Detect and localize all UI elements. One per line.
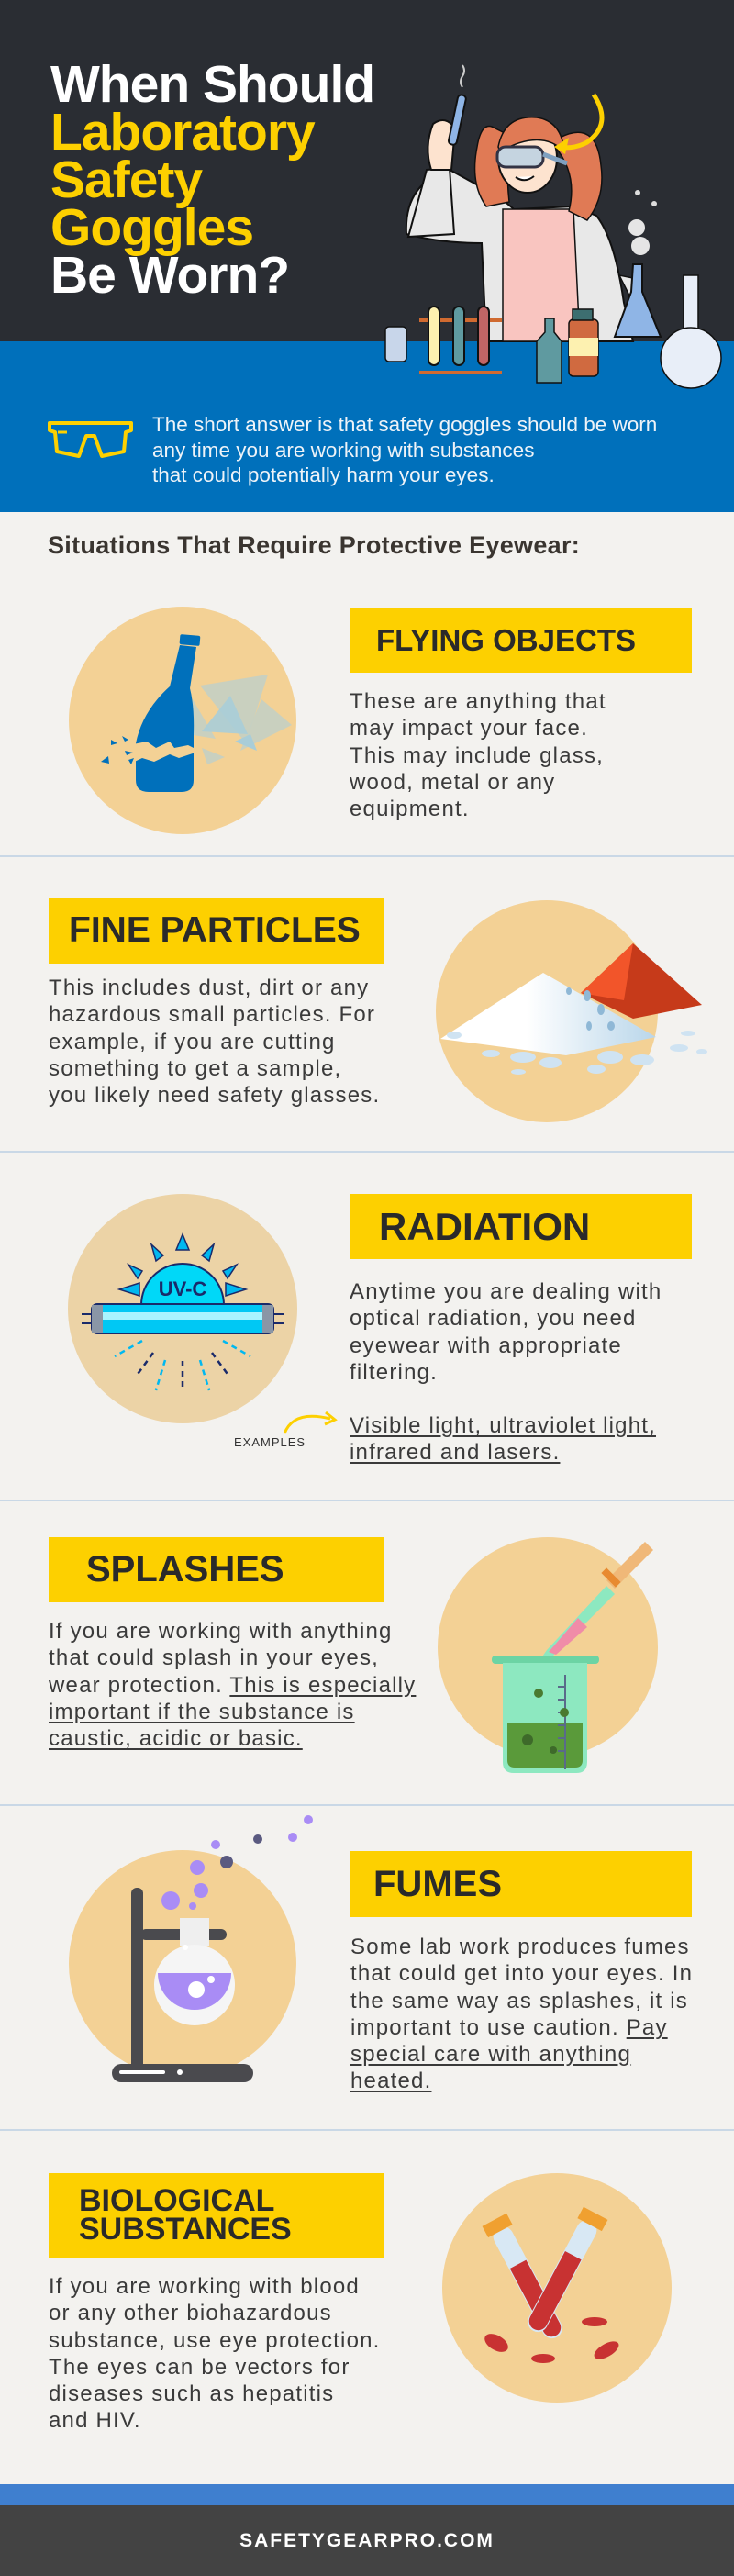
intro text [152, 413, 657, 486]
text: biological substances: The eyes can be vectors for [49, 2355, 350, 2380]
text: flying objects: These are anything that [350, 689, 606, 714]
panel: splashes [49, 1537, 417, 1751]
footer [0, 2505, 734, 2576]
text: splashes: If you are working with anything [49, 1619, 393, 1644]
icon: goggles [48, 421, 133, 458]
title: Laboratory [50, 103, 315, 162]
panel: radiation [234, 1194, 692, 1465]
panel: flying objects [350, 608, 692, 821]
icon: blood tubes [442, 2173, 672, 2403]
arrow: examples [283, 1411, 338, 1433]
text: fine particles: hazardous small particles. For [49, 1002, 375, 1027]
title [50, 55, 374, 305]
intro text: The short answer is that safety goggles should be worn [152, 413, 657, 436]
examples callout [234, 1411, 338, 1449]
heading: radiation: RADIATION [379, 1204, 590, 1248]
text: biological substances: diseases such as hepatitis [49, 2381, 334, 2406]
text: flying objects: equipment. [350, 797, 470, 821]
hair [475, 127, 514, 206]
text: fine particles: you likely need safety glasses. [49, 1083, 380, 1108]
rack and tubes [419, 318, 502, 322]
text: examples list [350, 1413, 656, 1465]
text: splashes: wear protection. This is especially [49, 1673, 416, 1698]
text: fumes: Some lab work produces fumes [350, 1935, 690, 1959]
text: flying objects [350, 689, 606, 821]
intro band [0, 341, 734, 512]
heading: flying objects [350, 608, 692, 673]
section heading: Situations That Require Protective Eyewear: [48, 531, 580, 559]
heading: biological substances: SUBSTANCES [79, 2212, 292, 2247]
title: Be Worn? [50, 246, 289, 305]
text: fine particles: This includes dust, dirt or any [49, 976, 369, 1000]
raised arm [408, 168, 454, 237]
icon: UV-C lamp [68, 1194, 297, 1423]
intro text: that could potentially harm your eyes. [152, 463, 495, 486]
text: fine particles: something to get a sample, [49, 1056, 341, 1081]
examples callout: EXAMPLES [234, 1435, 306, 1449]
title: Goggles [50, 198, 253, 257]
text: fumes: special care with anything [350, 2042, 631, 2067]
icon: powder piles [436, 900, 707, 1122]
text: flying objects: may impact your face. [350, 716, 588, 741]
panel: fine particles [49, 898, 384, 1108]
text: biological substances: and HIV. [49, 2408, 141, 2433]
text: radiation: Anytime you are dealing with [350, 1279, 662, 1304]
text: biological substances: If you are working with blood [49, 2274, 360, 2299]
footer stripe [0, 2484, 734, 2505]
text: fumes [350, 1935, 693, 2093]
text: flying objects: This may include glass, [350, 743, 604, 768]
text: fumes: the same way as splashes, it is [350, 1989, 688, 2013]
text: examples list: Visible light, ultraviolet light, [350, 1413, 656, 1438]
illustration: scientist with goggles [384, 64, 722, 389]
title: When Should [50, 55, 374, 114]
heading: biological substances [49, 2173, 384, 2258]
icon: flask on stand [69, 1815, 313, 2082]
text: examples list: infrared and lasers. [350, 1440, 560, 1465]
text: fumes: that could get into your eyes. In [350, 1961, 693, 1986]
header background [0, 0, 734, 341]
heading: biological substances: BIOLOGICAL [79, 2183, 274, 2218]
heading: fumes [350, 1851, 692, 1917]
text: flying objects: wood, metal or any [350, 770, 555, 795]
intro text: any time you are working with substances [152, 439, 534, 461]
text: radiation: filtering. [350, 1360, 438, 1385]
heading: flying objects: FLYING OBJECTS [376, 622, 636, 657]
heading: fine particles [49, 898, 384, 964]
round flask [684, 275, 698, 335]
text: splashes [49, 1619, 417, 1751]
test tube raised [448, 95, 467, 145]
text: biological substances: or any other biohazardous [49, 2301, 332, 2325]
text: fine particles: example, if you are cutting [49, 1030, 336, 1054]
text: radiation [350, 1279, 662, 1385]
text: splashes: important if the substance is [49, 1700, 355, 1724]
coat body [406, 170, 633, 341]
heading: radiation [350, 1194, 692, 1259]
icon: UV-C lamp: UV-C [159, 1277, 206, 1300]
goggles [497, 147, 543, 167]
heading: splashes [49, 1537, 384, 1602]
heading: fumes: FUMES [373, 1863, 502, 1903]
heading: fine particles: FINE PARTICLES [69, 910, 361, 950]
panel: biological substances [49, 2173, 384, 2433]
arrow to goggles [558, 95, 602, 148]
text: splashes: that could splash in your eyes, [49, 1645, 379, 1670]
text: radiation: eyewear with appropriate [350, 1333, 622, 1358]
footer: SAFETYGEARPRO.COM [239, 2530, 495, 2551]
text: biological substances [49, 2274, 381, 2433]
panel: fumes [350, 1851, 693, 2093]
icon: broken bottle [69, 607, 296, 834]
title: Safety [50, 151, 202, 209]
face [498, 123, 557, 193]
right hand with flask [619, 275, 642, 303]
text: fumes: heated. [350, 2069, 431, 2093]
heading: splashes: SPLASHES [86, 1549, 284, 1589]
bottles [385, 327, 406, 362]
text: fine particles [49, 976, 380, 1108]
text: biological substances: substance, use eye protection. [49, 2328, 381, 2353]
icon: dropper and beaker [438, 1537, 658, 1773]
text: radiation: optical radiation, you need [350, 1306, 637, 1331]
text: splashes: caustic, acidic or basic. [49, 1726, 303, 1751]
text: fumes: important to use caution. Pay [350, 2015, 668, 2040]
